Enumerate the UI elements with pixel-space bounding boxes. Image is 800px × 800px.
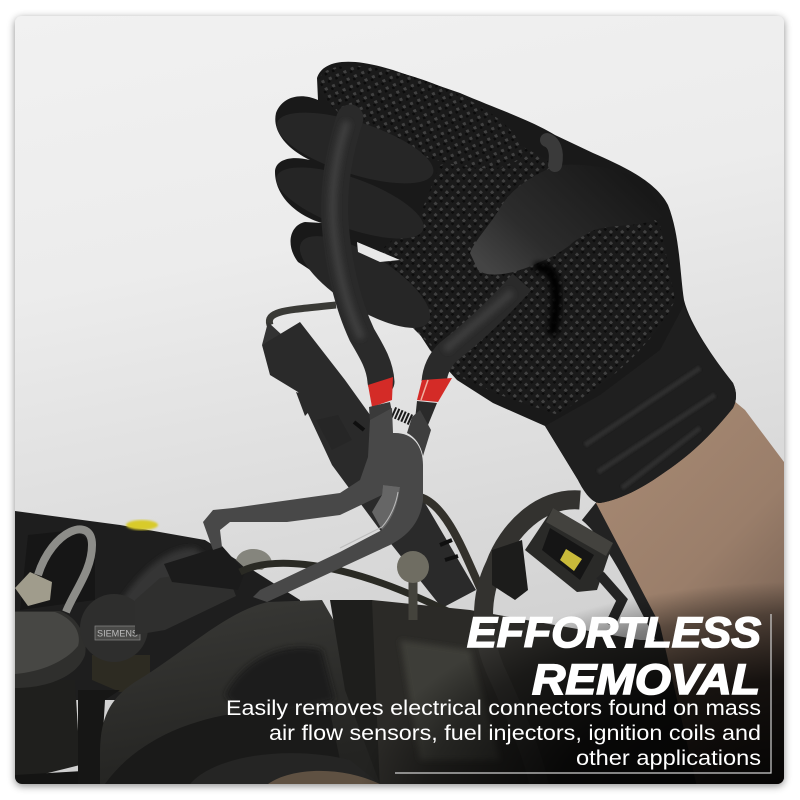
engine back cover: [15, 511, 300, 700]
thumb mound grip: [572, 237, 666, 256]
tool: left handle: [333, 118, 393, 422]
harness behind arm: [590, 510, 670, 640]
body text: air flow sensors, fuel injectors, ignition coils and: [269, 722, 761, 745]
glove fourth finger: [300, 236, 430, 328]
corrugated wiring harness: [474, 490, 581, 614]
heading: effortless removal: REMOVAL: [532, 656, 760, 704]
thumb: [470, 165, 665, 275]
red grip band left: [368, 377, 393, 407]
oil cap: [15, 611, 86, 775]
tool: plier head and jaws: [203, 408, 431, 602]
engine top cover: [15, 600, 380, 784]
body text: [226, 697, 761, 770]
sensor body: [80, 546, 449, 692]
red grip band right: [417, 378, 452, 402]
frame line around text: [395, 614, 771, 773]
glove index finger grip: [320, 66, 522, 168]
silver pipe: [38, 529, 92, 612]
glove wrist cuff: [545, 362, 736, 503]
heading: effortless removal: [467, 609, 761, 704]
gap between fingers: [357, 242, 400, 262]
harness clip: [492, 540, 528, 600]
arm: [596, 400, 790, 800]
tool: right handle: [415, 140, 556, 425]
hex nut: [15, 572, 52, 606]
body text: other applications: [576, 747, 761, 770]
glove grip palm: [370, 145, 675, 415]
wiring bracket behind tool: [262, 305, 482, 608]
sensor body: SIEMENS: [97, 628, 138, 638]
tool: spring: [393, 412, 411, 420]
glove second finger: [276, 112, 434, 184]
glove third finger: [276, 168, 424, 238]
electrical connector: [525, 508, 622, 625]
body text: Easily removes electrical connectors found on mass: [226, 697, 761, 720]
heading: effortless removal: EFFORTLESS: [467, 609, 761, 657]
right engine bay: [372, 551, 790, 790]
dark text overlay: [375, 587, 784, 784]
glove: [268, 45, 736, 503]
